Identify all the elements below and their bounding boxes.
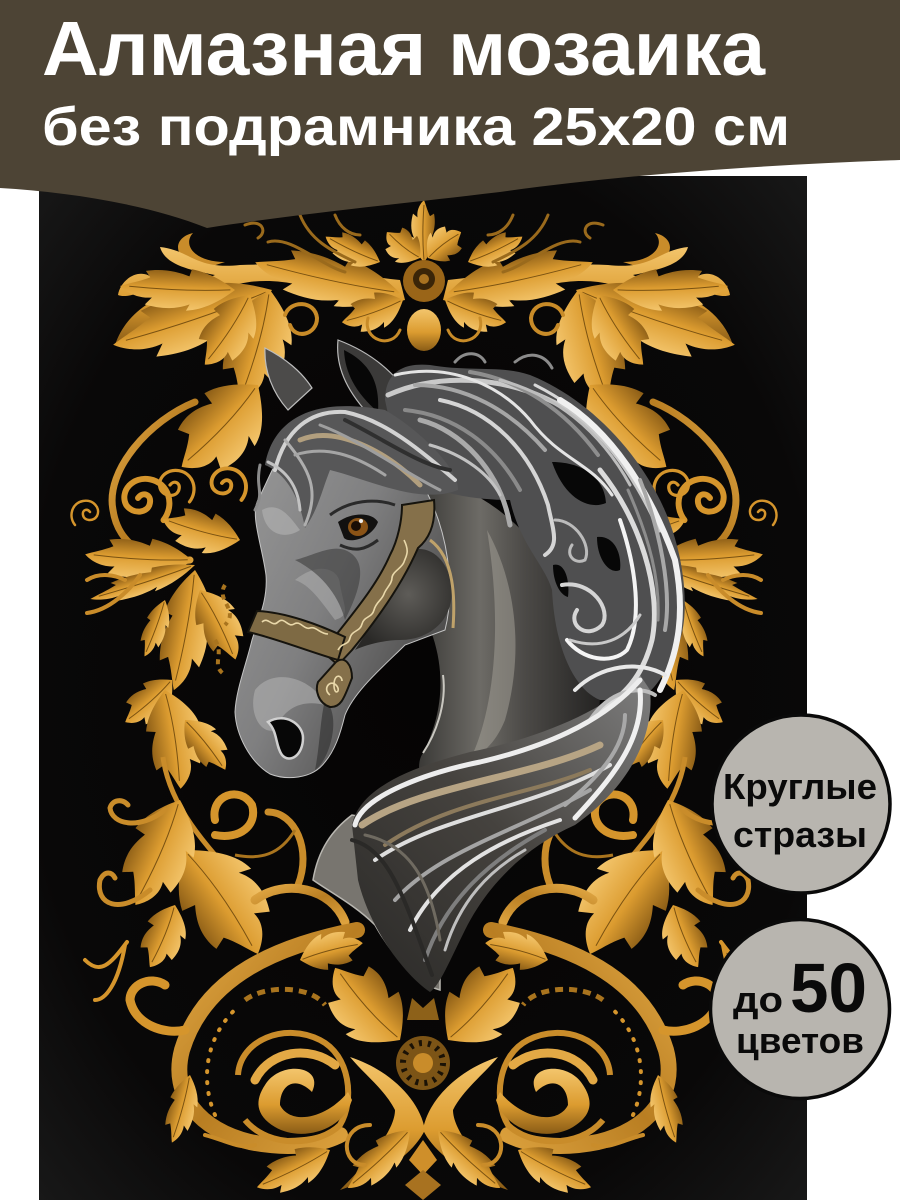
- ornament: lower left leaf cluster: [85, 757, 345, 1000]
- cheek: [355, 549, 452, 650]
- subtitle: без подрамника 25х20 см: [42, 97, 790, 157]
- ornament: left leaf column: [114, 566, 255, 793]
- right ear inner: [344, 350, 378, 412]
- ornament: bottom centre rosette: [396, 998, 450, 1200]
- left ear: [265, 348, 312, 410]
- title: Алмазная мозаика: [42, 6, 766, 92]
- neck throat rim light: [423, 675, 444, 753]
- face shading: [253, 507, 360, 770]
- badge: round rhinestones: [712, 715, 890, 893]
- header banner: [0, 0, 900, 228]
- badge: up to 50 colours: 50: [790, 949, 867, 1027]
- badge: round rhinestones: Круглые: [723, 766, 877, 807]
- badge: up to 50 colours: цветов: [736, 1020, 864, 1061]
- noseband: [248, 611, 345, 660]
- cheek gold crescent: [430, 540, 454, 628]
- bridle lower ornament: [317, 660, 352, 707]
- bridle gold pattern: [262, 420, 430, 695]
- ornament: lower left spiral scrolls: [130, 924, 425, 1200]
- horse neck highlight: [470, 530, 515, 760]
- cheek strap: [323, 500, 434, 665]
- brow band: [416, 405, 442, 472]
- forelock: [265, 406, 458, 528]
- horse chest: [313, 815, 440, 990]
- horse head: [235, 420, 450, 778]
- ornament: mirrored right half of golden frame: [423, 215, 776, 1200]
- ornament: top centre fleur: [376, 200, 471, 351]
- black gaps in mane: [552, 462, 620, 597]
- right ear: [338, 340, 412, 430]
- mane silver strands: [255, 354, 680, 975]
- ornament: left half of golden baroque frame: [72, 215, 425, 1200]
- panel: black artwork background: [39, 176, 807, 1200]
- ornament: left side vine: [72, 402, 246, 613]
- ornament: top fine curls: [245, 215, 400, 341]
- nostril: [268, 718, 303, 759]
- illustration: horse: [235, 340, 685, 992]
- horse neck: [400, 480, 600, 785]
- badge: up to 50 colours: до: [733, 979, 783, 1020]
- mane lower sweep: [352, 675, 651, 992]
- mane base: [385, 365, 685, 700]
- badge: round rhinestones: стразы: [733, 814, 867, 855]
- badge: up to 50 colours: [710, 920, 890, 1098]
- eye: [330, 501, 395, 549]
- ornament: top scroll leaves: [104, 225, 410, 494]
